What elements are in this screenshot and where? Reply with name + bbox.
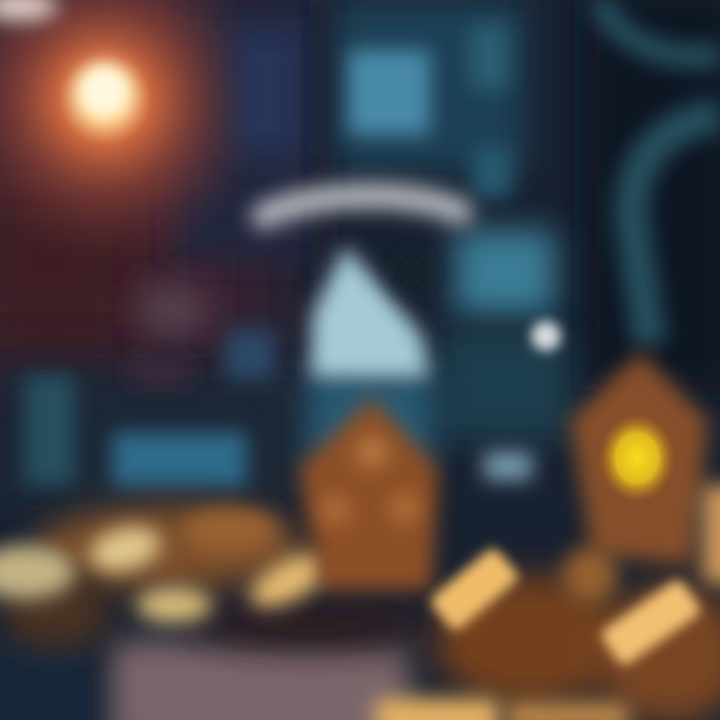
bottom ground [0, 601, 430, 720]
teal arcs [600, 0, 720, 345]
city buildings [25, 0, 570, 487]
pale triangle building [310, 245, 561, 378]
right coin pile [375, 546, 720, 720]
house: right with yellow window [570, 352, 720, 585]
house: center [298, 398, 438, 590]
white arc [264, 196, 460, 216]
sun glow [0, 0, 270, 265]
left coin pile [0, 506, 338, 650]
